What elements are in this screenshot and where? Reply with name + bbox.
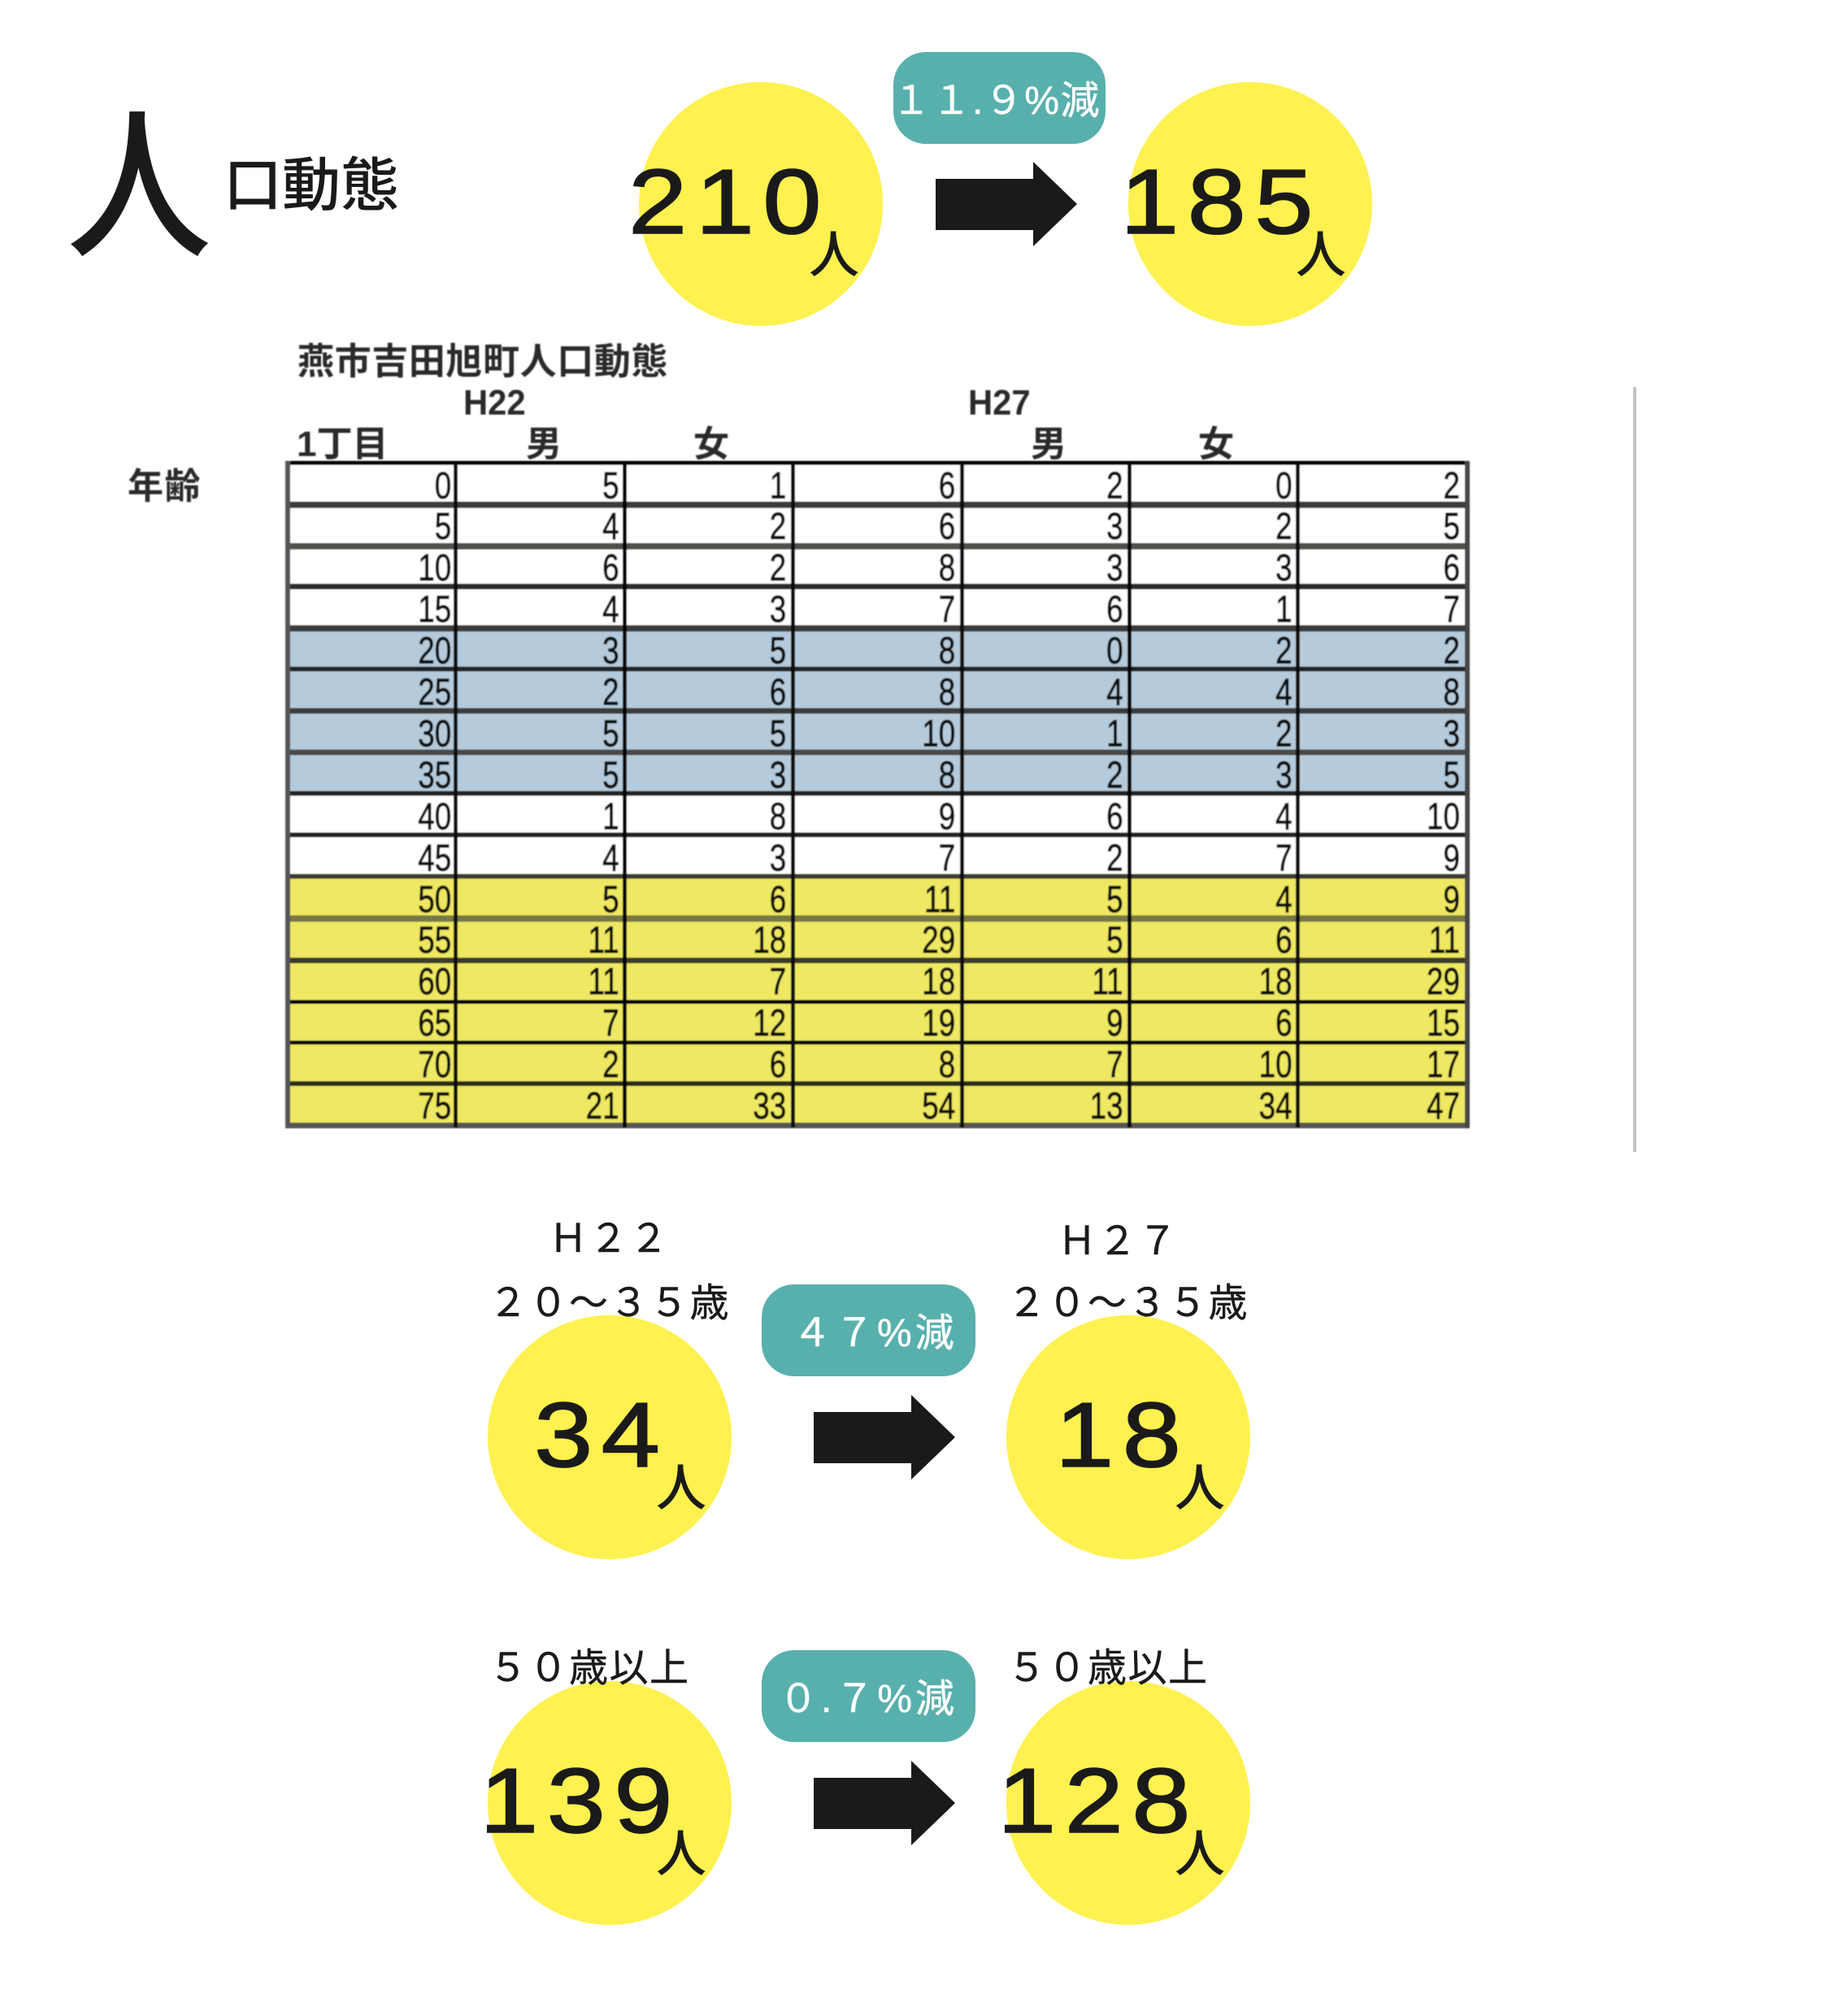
row: age 50: 6: [770, 878, 786, 920]
row: age 25: 6: [770, 671, 786, 713]
row: age 55: 6: [1275, 919, 1292, 961]
badge: 0.7% decrease: ０.７%減: [779, 1678, 958, 1721]
number: 139: 139: [480, 1749, 681, 1852]
row: age 55: 11: [588, 919, 619, 961]
row: age 15: 1: [1275, 588, 1292, 630]
row: age 45: 9: [1444, 836, 1460, 879]
row: age 75: 21: [586, 1084, 619, 1127]
circle: H27 total: [1128, 82, 1372, 326]
row: age 0: 0: [1275, 464, 1292, 506]
badge: 47% decrease: ４７%減: [793, 1312, 958, 1355]
row: age 30: 10: [922, 712, 955, 754]
row: age 60: 18: [1259, 960, 1292, 1002]
row: age 20: 2: [1275, 629, 1292, 671]
row: age 35: 2: [1106, 754, 1123, 796]
row: age 70: 70: [418, 1043, 451, 1085]
header: 男 H27: 男: [1031, 424, 1067, 464]
row: age 25: 2: [602, 671, 619, 713]
row: age 5: 3: [1106, 505, 1123, 547]
label: H22: Ｈ２２: [549, 1218, 670, 1261]
row: age 70: 6: [770, 1043, 786, 1085]
row: age 50: 11: [924, 878, 955, 920]
header: 男 H22: 男: [526, 424, 562, 464]
row: age 75: 54: [922, 1084, 955, 1127]
circle: H22 20-35: [488, 1315, 732, 1559]
row: age 20: 5: [770, 629, 786, 671]
row: age 35: 35: [418, 754, 451, 796]
row: age 10: 3: [1275, 546, 1292, 589]
row: age 15: 7: [939, 588, 955, 630]
table title: 燕市吉田旭町人口動態: [298, 341, 668, 382]
row: age 15: 4: [602, 588, 619, 630]
row: age 55: 29: [922, 919, 955, 961]
population table: [128, 341, 1470, 1128]
row: age 10: 10: [418, 546, 451, 589]
row: age 75: 13: [1090, 1084, 1123, 1127]
row: age 30: 3: [1444, 712, 1460, 754]
row: age 75: 34: [1259, 1084, 1292, 1127]
row: age 60: 11: [588, 960, 619, 1002]
row: age 65: 19: [922, 1001, 955, 1044]
row: age 45: 45: [418, 836, 451, 879]
row: age 65: 12: [753, 1001, 786, 1044]
number: 34: 34: [534, 1384, 668, 1486]
age 50+ comparison: [480, 1647, 1250, 1925]
arrow: [936, 162, 1077, 246]
row: age 5: 6: [939, 505, 955, 547]
row: age 5: 5: [435, 505, 451, 547]
badge: 47% decrease: [762, 1284, 975, 1376]
row: age 20: 3: [602, 629, 619, 671]
row: age 75: 75: [418, 1084, 451, 1127]
title: [67, 57, 399, 291]
row: age 30: 2: [1275, 712, 1292, 754]
number: 210: 210: [628, 150, 830, 253]
row: age 70: 10: [1259, 1043, 1292, 1085]
row: age 45: 7: [939, 836, 955, 879]
row: age 20: 20: [418, 629, 451, 671]
row: age 50: 5: [602, 878, 619, 920]
arrow: [814, 1761, 955, 1845]
row: age 35: 3: [1275, 754, 1292, 796]
row: age 55: 11: [1429, 919, 1460, 961]
label: 50+ left: ５０歳以上: [489, 1647, 690, 1690]
table values: [418, 464, 1460, 1127]
row: age 10: 8: [939, 546, 955, 589]
badge: 0.7% decrease: [762, 1650, 975, 1742]
circle: H27 20-35: [1006, 1315, 1250, 1559]
label: 20-35 right: ２０〜３５歳: [1007, 1282, 1249, 1325]
label: 50+ right: ５０歳以上: [1007, 1647, 1209, 1690]
row: age 5: 2: [1275, 505, 1292, 547]
row: age 40: 4: [1275, 795, 1292, 837]
row: age 0: 2: [1444, 464, 1460, 506]
row: age 35: 5: [1444, 754, 1460, 796]
title remaining characters: 口動態: [224, 137, 399, 223]
row: age 0: 1: [770, 464, 786, 506]
row: age 60: 18: [922, 960, 955, 1002]
row: age 0: 0: [435, 464, 451, 506]
row: age 30: 5: [602, 712, 619, 754]
header: H27: H27: [968, 383, 1031, 423]
row: age 50: 9: [1444, 878, 1460, 920]
row: age 75: 47: [1427, 1084, 1460, 1127]
row: age 55: 5: [1106, 919, 1123, 961]
row: age 75: 33: [753, 1084, 786, 1127]
row: age 50: 4: [1275, 878, 1292, 920]
label: H27: Ｈ２７: [1058, 1220, 1179, 1263]
badge: 11.9% decrease: １１.９%減: [892, 80, 1101, 123]
circle: H22 50+: [488, 1681, 732, 1925]
row: age 35: 5: [602, 754, 619, 796]
row: age 10: 3: [1106, 546, 1123, 589]
row: age 10: 6: [1444, 546, 1460, 589]
row: age 30: 5: [770, 712, 786, 754]
age 20-35 comparison: [488, 1218, 1250, 1559]
row: age 0: 5: [602, 464, 619, 506]
row: age 65: 7: [602, 1001, 619, 1044]
row: age 70: 17: [1427, 1043, 1460, 1085]
number: 185: 185: [1120, 150, 1322, 253]
row: age 30: 30: [418, 712, 451, 754]
row: age 25: 8: [1444, 671, 1460, 713]
row: age 25: 4: [1275, 671, 1292, 713]
row: age 15: 6: [1106, 588, 1123, 630]
row: age 5: 2: [770, 505, 786, 547]
row: age 25: 8: [939, 671, 955, 713]
number: 128: 128: [997, 1749, 1199, 1852]
row: age 60: 7: [770, 960, 786, 1002]
unit: 人: 人: [656, 1447, 706, 1520]
table grid lines: [285, 461, 1470, 1128]
badge: 11.9% decrease: [892, 52, 1106, 144]
row: age 40: 40: [418, 795, 451, 837]
row: age 20: 0: [1106, 629, 1123, 671]
header: 女 H27: 女: [1198, 424, 1234, 464]
row: age 0: 2: [1106, 464, 1123, 506]
row: age 50: 50: [418, 878, 451, 920]
row: age 20: 8: [939, 629, 955, 671]
row: age 40: 1: [602, 795, 619, 837]
row: age 40: 8: [770, 795, 786, 837]
row: age 10: 2: [770, 546, 786, 589]
row: age 0: 6: [939, 464, 955, 506]
header: 1丁目: 1丁目: [297, 424, 388, 464]
row: age 65: 15: [1427, 1001, 1460, 1044]
total population comparison: [628, 52, 1372, 326]
unit: 人: 人: [1175, 1813, 1225, 1886]
row: age 30: 1: [1106, 712, 1123, 754]
row: age 45: 2: [1106, 836, 1123, 879]
unit: 人: 人: [656, 1813, 706, 1886]
row: age 10: 6: [602, 546, 619, 589]
vertical rule: [1633, 387, 1636, 1152]
circle: H22 total: [639, 82, 883, 326]
row: age 50: 5: [1106, 878, 1123, 920]
label: 20-35 left: ２０〜３５歳: [489, 1282, 730, 1325]
number: 18: 18: [1055, 1384, 1189, 1486]
row: age 60: 11: [1092, 960, 1123, 1002]
row: age 15: 3: [770, 588, 786, 630]
unit: 人: 人: [1175, 1447, 1225, 1520]
title large character: 人: [67, 57, 211, 291]
row: age 5: 4: [602, 505, 619, 547]
unit: 人: 人: [1296, 214, 1346, 287]
row: age 65: 9: [1106, 1001, 1123, 1044]
row: age 20: 2: [1444, 629, 1460, 671]
circle: H27 50+: [1006, 1681, 1250, 1925]
row: age 40: 10: [1427, 795, 1460, 837]
row: age 45: 3: [770, 836, 786, 879]
row: age 55: 18: [753, 919, 786, 961]
row: age 35: 3: [770, 754, 786, 796]
row: age 35: 8: [939, 754, 955, 796]
arrow: [814, 1395, 955, 1479]
row: age 65: 6: [1275, 1001, 1292, 1044]
row: age 45: 7: [1275, 836, 1292, 879]
unit: 人: 人: [809, 214, 859, 287]
row: age 45: 4: [602, 836, 619, 879]
row: age 25: 25: [418, 671, 451, 713]
header: 年齢: 年齢: [128, 467, 202, 506]
header: 女 H22: 女: [693, 424, 729, 464]
row: age 70: 2: [602, 1043, 619, 1085]
row: age 55: 55: [418, 919, 451, 961]
header: H22: H22: [463, 383, 526, 423]
row: age 60: 60: [418, 960, 451, 1002]
row: age 70: 8: [939, 1043, 955, 1085]
row: age 15: 15: [418, 588, 451, 630]
row: age 60: 29: [1427, 960, 1460, 1002]
row: age 5: 5: [1444, 505, 1460, 547]
table bands: [289, 463, 1467, 1127]
row: age 40: 6: [1106, 795, 1123, 837]
row: age 25: 4: [1106, 671, 1123, 713]
row: age 65: 65: [418, 1001, 451, 1044]
row: age 15: 7: [1444, 588, 1460, 630]
row: age 40: 9: [939, 795, 955, 837]
row: age 70: 7: [1106, 1043, 1123, 1085]
